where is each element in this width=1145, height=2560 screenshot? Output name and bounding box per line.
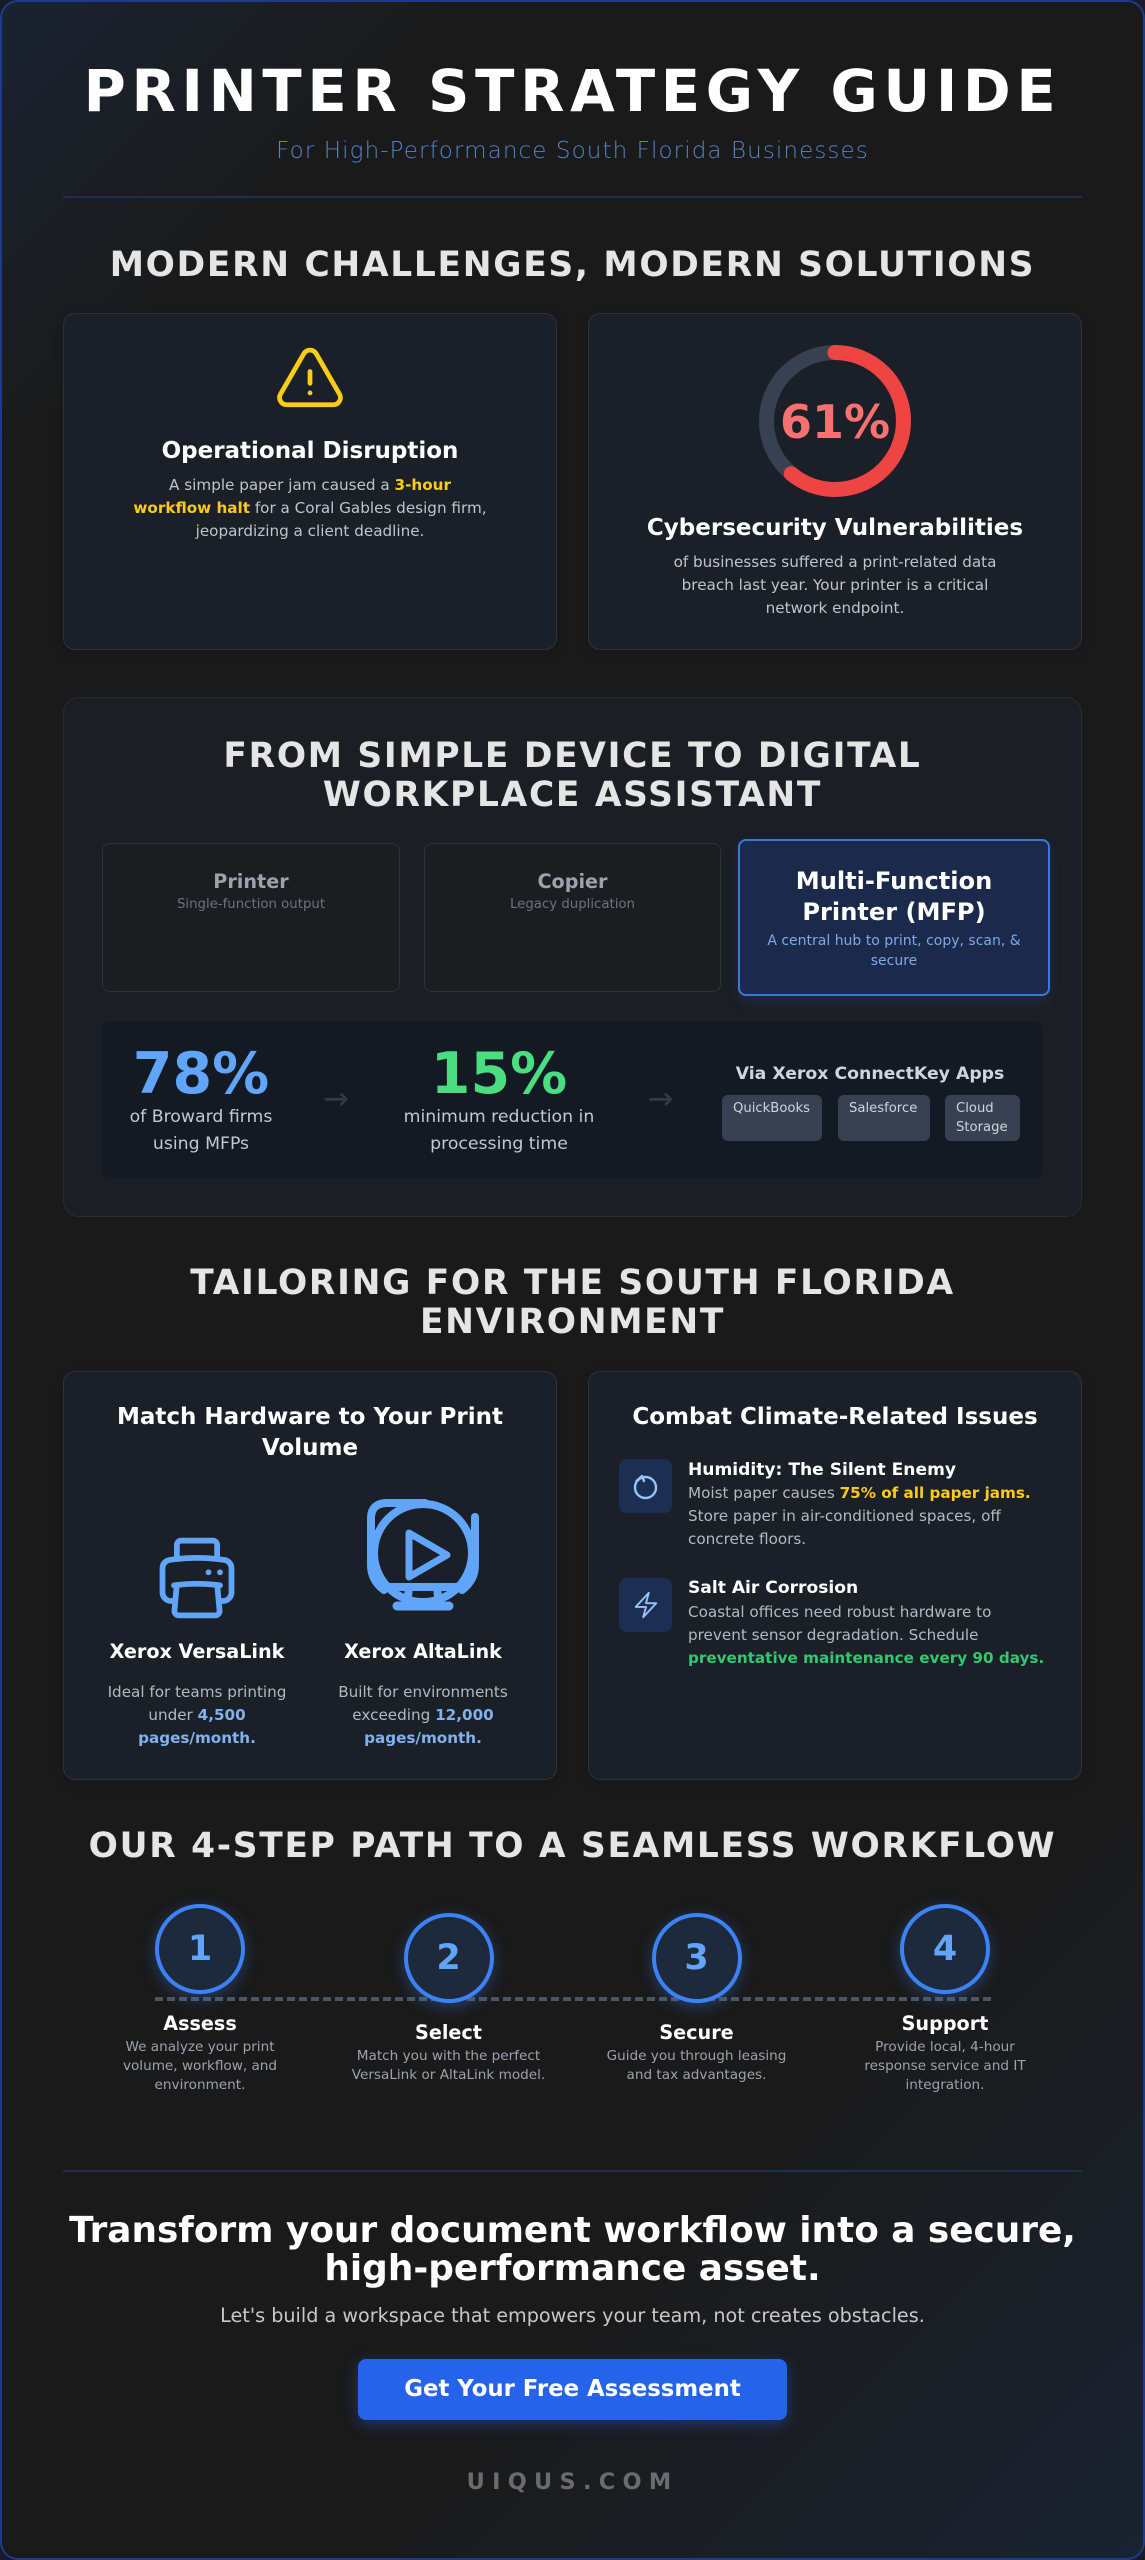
donut chart: 61%: 61%: [780, 394, 890, 448]
step 2: [352, 1909, 545, 2082]
step 2: Select: [415, 2021, 482, 2044]
heading: south florida: TAILORING FOR THE SOUTH FLORIDA: [190, 1263, 955, 1303]
item: salt air: [619, 1578, 1044, 1667]
title: PRINTER STRATEGY GUIDE: [84, 58, 1061, 125]
step 1: 1: [188, 1929, 212, 1969]
card: copier: Legacy duplication: [510, 896, 635, 912]
card: multi-function printer: Multi-Function: [796, 867, 992, 895]
donut chart: 61%: [759, 345, 911, 497]
step 3: Secure: [659, 2021, 734, 2044]
heading: WORKPLACE ASSISTANT: [323, 775, 822, 815]
card: printer: Printer: [213, 870, 289, 892]
item: humidity: concrete floors.: [688, 1530, 806, 1548]
step 2: VersaLink or AltaLink model.: [352, 2066, 545, 2082]
card: multi-function printer: A central hub to print, copy, scan, &: [767, 933, 1021, 949]
product: altalink: Built for environments: [338, 1682, 508, 1700]
process timeline: [123, 1900, 1026, 2092]
panel: operational disruption: [63, 313, 557, 650]
heading: four steps: OUR 4-STEP PATH TO A SEAMLESS WORKFLOW: [89, 1826, 1056, 1866]
card text: workflow halt for a Coral Gables design firm,: [133, 499, 487, 517]
icon: warning triangle: [277, 348, 343, 408]
product: versalink: Xerox VersaLink: [110, 1640, 284, 1663]
step 3: and tax advantages.: [627, 2066, 766, 2082]
stat: 15%: [404, 1041, 594, 1154]
card: multi-function printer: secure: [871, 952, 917, 968]
step 3: [607, 1909, 786, 2082]
connectkey apps: Cloud: [956, 1100, 994, 1116]
icon: printer: [160, 1538, 234, 1618]
connectkey apps: QuickBooks: [733, 1100, 810, 1116]
step 4: Provide local, 4-hour: [875, 2038, 1015, 2054]
subtitle: For High-Performance South Florida Businesses: [276, 138, 869, 164]
card title: Volume: [262, 1434, 358, 1460]
heading: modern challenges: MODERN CHALLENGES, MODERN SOLUTIONS: [110, 244, 1035, 284]
item: humidity: Store paper in air-conditioned spaces, off: [688, 1506, 1001, 1524]
product: altalink: pages/month.: [364, 1728, 482, 1746]
icon: bolt: [619, 1578, 672, 1632]
panel: cybersecurity vulnerabilities: [588, 313, 1082, 650]
call to action heading: high-performance asset.: [324, 2248, 821, 2289]
stat: 15%: 15%: [431, 1041, 567, 1107]
step 3: 3: [684, 1938, 709, 1978]
stat: 15%: processing time: [430, 1134, 568, 1154]
product: altalink: Xerox AltaLink: [344, 1640, 502, 1663]
arrow: →: [648, 1081, 673, 1117]
step 2: 2: [436, 1938, 461, 1978]
stat: 78%: [130, 1041, 272, 1154]
button: Get Your Free Assessment: [404, 2376, 741, 2402]
stat: 78%: 78%: [133, 1041, 269, 1107]
step 4: Support: [902, 2012, 988, 2035]
arrow: →: [323, 1081, 349, 1117]
step 1: [123, 1900, 277, 2092]
step 2: Match you with the perfect: [357, 2048, 540, 2064]
card: copier: Copier: [537, 870, 608, 892]
card text: [674, 552, 996, 616]
item: salt air: Coastal offices need robust hardware to: [688, 1603, 991, 1621]
card text: A simple paper jam caused a 3-hour: [169, 476, 451, 494]
icon: humidity: [619, 1459, 672, 1513]
card text: jeopardizing a client deadline.: [196, 522, 424, 540]
call to action heading: [69, 2210, 1076, 2289]
product: versalink: pages/month.: [138, 1728, 256, 1746]
panel: climate issues: [588, 1371, 1082, 1780]
card text: [133, 476, 487, 540]
call to action heading: Transform your document workflow into a secure,: [69, 2210, 1076, 2251]
step 4: response service and IT: [864, 2058, 1026, 2074]
step 3: Guide you through leasing: [607, 2048, 786, 2064]
heading: FROM SIMPLE DEVICE TO DIGITAL: [223, 736, 922, 776]
stats strip: [102, 1021, 1043, 1178]
icon: display with play button: [367, 1499, 479, 1610]
item: salt air: Salt Air Corrosion: [688, 1578, 858, 1598]
card title: Combat Climate-Related Issues: [632, 1404, 1038, 1430]
connectkey apps: Salesforce: [849, 1100, 917, 1116]
product: altalink: exceeding 12,000: [352, 1706, 494, 1724]
item: humidity: [619, 1459, 1031, 1548]
connectkey apps: [722, 1064, 1020, 1141]
card text: breach last year. Your printer is a critical: [682, 576, 988, 594]
stat: 15%: minimum reduction in: [404, 1106, 594, 1126]
item: humidity: Moist paper causes 75% of all paper jams.: [688, 1484, 1031, 1502]
card: printer: [102, 843, 400, 992]
item: salt air: prevent sensor degradation. Schedule: [688, 1626, 978, 1644]
heading: south florida: ENVIRONMENT: [420, 1302, 725, 1342]
panel: from device to assistant: [63, 697, 1082, 1217]
card: multi-function printer: [738, 839, 1050, 996]
product: versalink: Ideal for teams printing: [108, 1682, 286, 1700]
step 4: [864, 1900, 1026, 2092]
product: versalink: under 4,500: [148, 1706, 246, 1724]
card: multi-function printer: Printer (MFP): [802, 898, 986, 926]
card title: Cybersecurity Vulnerabilities: [647, 515, 1023, 541]
product: altalink: [338, 1640, 508, 1746]
step 1: volume, workflow, and: [123, 2058, 277, 2074]
connectkey apps: Storage: [956, 1120, 1008, 1134]
connectkey apps: Via Xerox ConnectKey Apps: [736, 1064, 1004, 1084]
stat: 78%: using MFPs: [153, 1134, 249, 1154]
card title: [117, 1404, 503, 1460]
heading: [223, 736, 922, 815]
card text: network endpoint.: [766, 598, 904, 616]
card text: of businesses suffered a print-related data: [674, 552, 996, 570]
item: salt air: preventative maintenance every 90 days.: [688, 1649, 1044, 1667]
step 1: environment.: [155, 2076, 245, 2092]
card title: Operational Disruption: [162, 438, 458, 464]
heading: south florida: [190, 1263, 955, 1342]
step 4: 4: [933, 1929, 957, 1969]
item: humidity: Humidity: The Silent Enemy: [688, 1460, 956, 1480]
button: [358, 2359, 787, 2420]
step 1: We analyze your print: [125, 2038, 275, 2054]
call to action text: Let's build a workspace that empowers your team, not creates obstacles.: [220, 2304, 925, 2327]
card title: Match Hardware to Your Print: [117, 1404, 503, 1430]
stat: 78%: of Broward firms: [130, 1106, 272, 1126]
panel: match hardware: [63, 1371, 557, 1780]
step 1: Assess: [163, 2012, 237, 2035]
card: copier: [424, 843, 721, 992]
step 4: integration.: [906, 2076, 984, 2092]
product: versalink: [108, 1640, 286, 1746]
footer brand: UIQUS.COM: [467, 2469, 678, 2495]
card: printer: Single-function output: [177, 896, 325, 912]
